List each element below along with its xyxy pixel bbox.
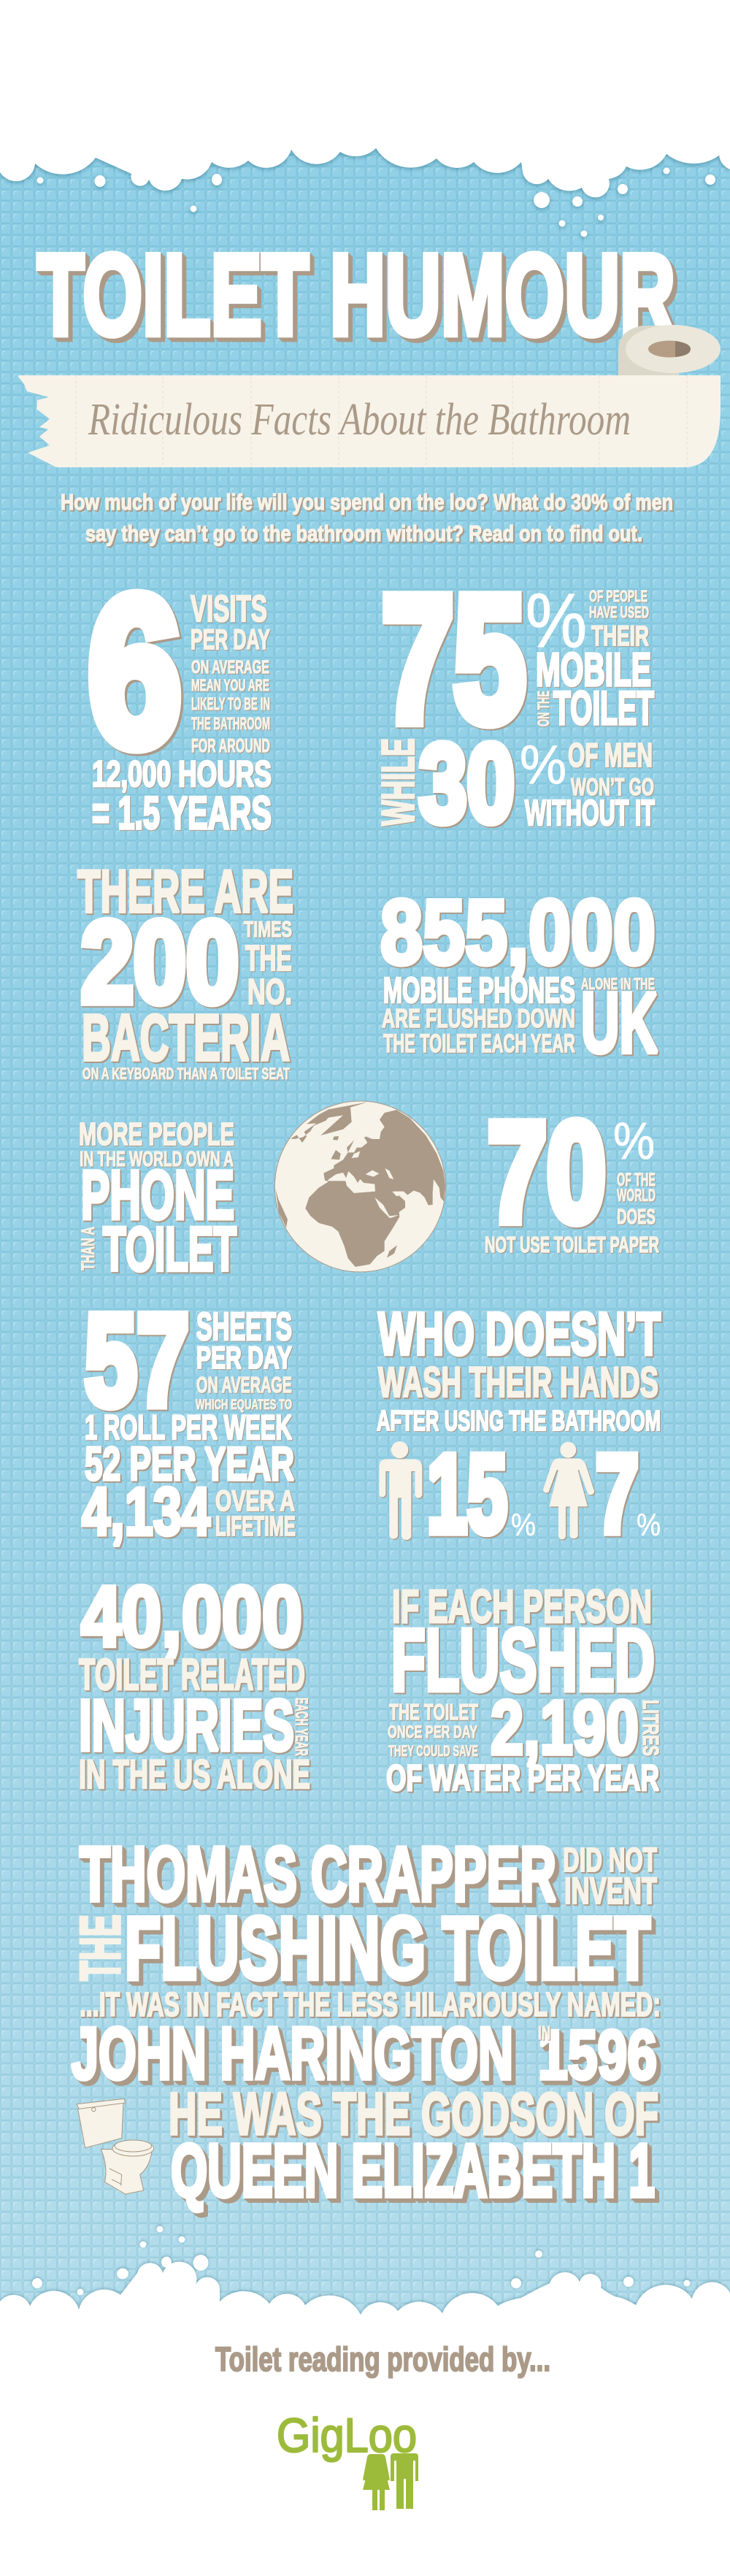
phones text block: MOBILE PHONES	[383, 971, 575, 1011]
the toilet text block: THEY COULD SAVE	[388, 1743, 478, 1760]
sheets text block	[85, 1305, 292, 1446]
visits text block: FOR AROUND	[191, 735, 270, 756]
phones text block: THE TOILET EACH YEAR	[383, 1030, 575, 1058]
mobile text block	[534, 587, 654, 735]
footer credit line: Toilet reading provided by...	[215, 2340, 550, 2378]
hours text block	[92, 754, 272, 839]
phones text block: ALONE IN THE	[581, 975, 655, 993]
world text block: WORLD	[617, 1186, 656, 1205]
world text block: OF THE	[617, 1170, 656, 1190]
number 15: 15	[427, 1432, 507, 1556]
hours text block: = 1.5 YEARS	[92, 788, 272, 839]
over a lifetime: LIFETIME	[215, 1511, 296, 1542]
the toilet text block: THE TOILET	[389, 1699, 478, 1725]
keyboard line: ON A KEYBOARD THAN A TOILET SEAT	[82, 1065, 290, 1083]
world text block	[485, 1170, 659, 1257]
logo: GigLoo	[277, 2408, 418, 2510]
panel: flushed once per day	[386, 1580, 664, 1798]
panel: while 30% of men	[373, 721, 655, 846]
big number 855,000: 855,000	[380, 882, 656, 984]
bacteria word: BACTERIA	[82, 1002, 290, 1075]
logo man figure	[391, 2453, 418, 2509]
visits text block	[191, 588, 270, 756]
more people text block: IN THE WORLD OWN A	[80, 1148, 234, 1171]
panel: bacteria	[77, 857, 293, 1083]
sheets text block: WHICH EQUATES TO	[196, 1398, 292, 1413]
times the no.: TIMES	[244, 916, 292, 942]
top foam with bubbles	[0, 0, 730, 237]
the toilet text block: ONCE PER DAY	[388, 1722, 477, 1742]
sheets text block: ON AVERAGE	[196, 1372, 292, 1398]
icon: man	[379, 1441, 422, 1540]
visits text block: PER DAY	[191, 624, 270, 656]
sheets text block: 1 ROLL PER WEEK	[85, 1408, 292, 1446]
visits text block: MEAN YOU ARE	[191, 676, 269, 694]
icon: toilet roll	[618, 325, 721, 377]
big number 70: 70	[488, 1093, 606, 1251]
big number 30: 30	[419, 721, 515, 846]
small word in: IN	[538, 2022, 550, 2044]
panel: who doesn't wash their hands	[377, 1300, 661, 1556]
over a lifetime	[215, 1485, 296, 1542]
bottom foam with bubbles	[0, 2226, 730, 2576]
the toilet text block	[388, 1699, 478, 1760]
vertical word litres: LITRES	[638, 1700, 664, 1756]
percent sign women: %	[637, 1508, 661, 1543]
times the no.: THE	[245, 939, 292, 978]
icon: woman	[543, 1442, 594, 1539]
vertical word the: THE	[68, 1914, 132, 1981]
more people text block: MORE PEOPLE	[79, 1116, 234, 1152]
panel: 6 visits per day	[88, 553, 272, 839]
logo woman figure	[363, 2454, 390, 2510]
paper strip	[18, 375, 721, 467]
did not invent: DID NOT	[563, 1841, 657, 1879]
percent sign: %	[613, 1113, 655, 1170]
toilet roll banner	[18, 325, 721, 467]
injuries: INJURIES	[79, 1684, 294, 1766]
intro text	[61, 489, 673, 546]
number 2,190: 2,190	[491, 1685, 639, 1771]
men text block: OF MEN	[568, 736, 653, 774]
visits text block: LIKELY TO BE IN	[191, 694, 270, 714]
mobile text block: OF PEOPLE	[589, 587, 648, 605]
big number 200: 200	[81, 898, 239, 1027]
more people text block	[79, 1116, 234, 1171]
phones text block: ARE FLUSHED DOWN	[382, 1003, 575, 1033]
icon: globe	[274, 1101, 445, 1272]
icon: toilet	[77, 2098, 154, 2194]
panel: thomas crapper	[68, 1831, 661, 2212]
times the no.: NO.	[247, 973, 292, 1012]
panel: 75% mobile on the toilet	[382, 559, 654, 759]
mobile text block: ON THE	[534, 691, 553, 727]
number 4,134: 4,134	[82, 1473, 210, 1549]
world text block: DOES	[617, 1205, 656, 1229]
visits text block: ON AVERAGE	[191, 657, 269, 678]
logo wordmark: GigLoo	[277, 2408, 417, 2462]
big number 40,000: 40,000	[81, 1568, 302, 1664]
big number 6: 6	[88, 553, 181, 789]
mobile text block: HAVE USED	[589, 603, 649, 621]
vertical words each year: EACH YEAR	[291, 1698, 311, 1756]
vertical word while: WHILE	[373, 738, 424, 826]
visits text block: VISITS	[191, 588, 267, 629]
mobile text block: TOILET	[553, 681, 654, 735]
mobile text block: THEIR	[591, 621, 649, 652]
did not invent	[563, 1841, 657, 1912]
visits text block: THE BATHROOM	[191, 714, 270, 734]
panel: phone vs toilet	[78, 1116, 237, 1284]
per year line: 52 PER YEAR	[85, 1437, 294, 1490]
sheets text block: SHEETS	[196, 1305, 292, 1349]
vertical words than a: THAN A	[78, 1227, 99, 1270]
panel: 40,000 injuries	[79, 1568, 311, 1797]
in the us alone: IN THE US ALONE	[79, 1751, 310, 1797]
phones text block	[382, 971, 655, 1058]
men text block: WON’T GO	[571, 773, 654, 800]
panel: 855,000 mobile phones	[380, 882, 658, 1070]
john harington: JOHN HARINGTON	[72, 2013, 513, 2095]
men text block	[525, 736, 655, 833]
men text block: WITHOUT IT	[525, 794, 655, 833]
over a lifetime: OVER A	[215, 1485, 295, 1517]
big number 57: 57	[85, 1287, 189, 1433]
toilet word: TOILET	[103, 1215, 237, 1284]
percent sign: %	[526, 578, 587, 664]
UK word: UK	[581, 975, 658, 1070]
percent sign: %	[520, 734, 566, 795]
phone word: PHONE	[81, 1157, 234, 1234]
big number 75: 75	[382, 559, 526, 759]
there are heading: THERE ARE	[77, 857, 293, 925]
hours text block: 12,000 HOURS	[92, 754, 272, 794]
mobile text block: MOBILE	[536, 643, 651, 696]
panel: 57 sheets	[82, 1287, 296, 1549]
year 1596: 1596	[538, 2016, 657, 2094]
toilet related: TOILET RELATED	[79, 1650, 305, 1699]
times the no.	[244, 916, 292, 1012]
number 7: 7	[596, 1432, 639, 1556]
sheets text block: PER DAY	[196, 1341, 292, 1376]
panel: 70% no toilet paper	[485, 1093, 659, 1257]
did not invent: INVENT	[564, 1870, 657, 1912]
percent sign men: %	[511, 1508, 536, 1543]
